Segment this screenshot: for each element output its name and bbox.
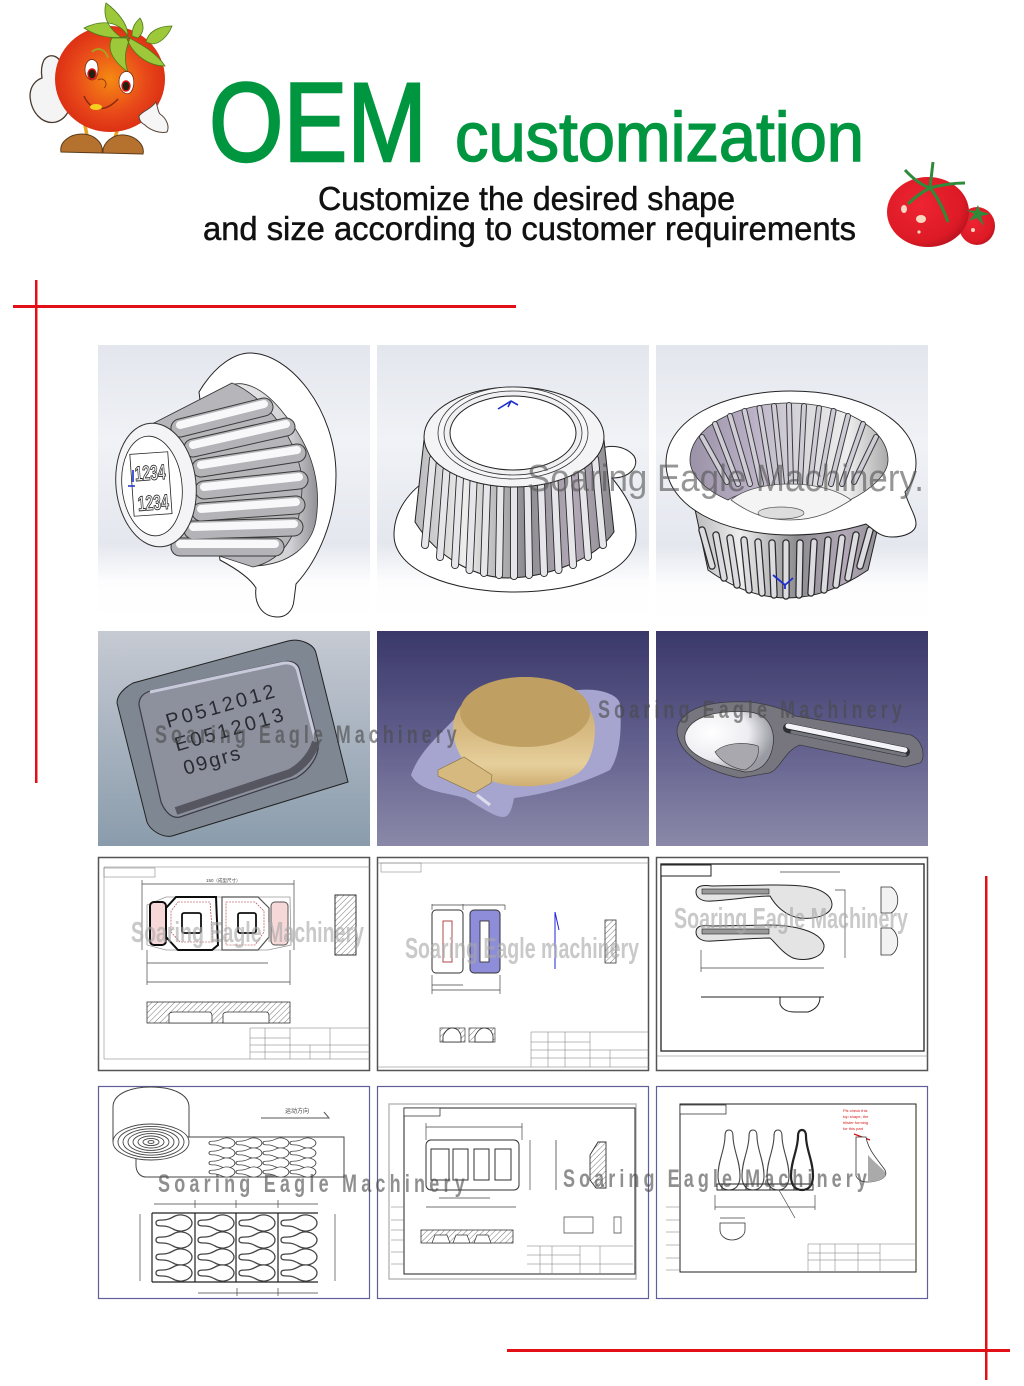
material strip xyxy=(136,1137,344,1177)
cup cavity wall xyxy=(690,403,888,500)
mascot smile xyxy=(84,96,118,109)
drawing sheet lines xyxy=(104,867,370,1059)
left slot xyxy=(443,921,452,962)
lower section view xyxy=(147,1002,290,1023)
drawing label box xyxy=(404,1108,440,1116)
cup lid circle xyxy=(450,396,576,470)
left pocket xyxy=(432,910,463,973)
panel: drawing of twin tray xyxy=(98,858,370,1070)
decorative corner: top left red cross lines xyxy=(13,280,516,783)
watermark: spoon model: Soaring Eagle Machinery xyxy=(598,695,902,724)
direction arrow xyxy=(261,1112,329,1118)
direction label: 运动方向 xyxy=(285,1107,309,1115)
cup flange with tab xyxy=(394,446,636,592)
gold tab xyxy=(438,757,492,793)
dimension lines xyxy=(426,1123,530,1207)
cup flange with tab xyxy=(199,353,336,617)
mascot shoes xyxy=(61,134,143,154)
profile view xyxy=(701,997,824,1012)
panel: drawing of two spoons xyxy=(656,858,928,1070)
cavity ribs xyxy=(702,405,876,484)
title block xyxy=(531,1032,649,1067)
tray outline xyxy=(426,1140,519,1190)
left strip table xyxy=(391,1207,404,1264)
spoon base row xyxy=(717,1184,813,1190)
vertical label line xyxy=(555,1140,557,1190)
watermark: drawing three: Soaring Eagle Machinery xyxy=(674,903,908,935)
drawing label box xyxy=(661,865,711,876)
cup body xyxy=(415,440,614,578)
right pocket filled xyxy=(470,910,500,973)
blue direction line xyxy=(555,912,559,969)
cup end face xyxy=(110,419,202,551)
drawing sheet lines xyxy=(378,863,649,1067)
label plate with numbers: 1234 xyxy=(137,491,170,516)
mascot leaves xyxy=(84,3,172,72)
mascot: tomato character xyxy=(30,3,172,154)
panel: spoon model xyxy=(656,631,928,846)
axis marker xyxy=(498,401,518,409)
panel background xyxy=(377,345,649,620)
mascot right glove xyxy=(139,102,168,133)
embossed codes: P0512012 xyxy=(163,680,280,733)
left strip table xyxy=(666,1207,680,1270)
mascot legs xyxy=(85,125,118,141)
tray slots xyxy=(431,1149,511,1180)
inner flange ring xyxy=(225,384,318,566)
small part views xyxy=(564,1217,621,1233)
mascot tongue xyxy=(90,104,102,110)
cup rim collar xyxy=(424,387,604,487)
side section view xyxy=(335,895,356,955)
panel: drawing of two pockets xyxy=(378,858,649,1070)
panel: embossed tray model xyxy=(98,631,370,846)
spoon bowl xyxy=(685,712,773,772)
strip spoons xyxy=(209,1138,316,1177)
dimension line top xyxy=(142,880,294,985)
side spoon view xyxy=(856,1137,886,1182)
spoon flange xyxy=(677,702,923,778)
panel: four-slot tray drawing xyxy=(378,1086,648,1298)
drawing frame xyxy=(378,858,648,1070)
watermark: drawing two: Soaring Eagle machinery xyxy=(405,933,639,965)
cup body xyxy=(150,383,302,567)
tray flange xyxy=(117,640,348,836)
dimension lines xyxy=(715,1190,815,1218)
drawing frame xyxy=(378,1086,648,1298)
gold cup body xyxy=(453,677,595,786)
twin tray outline xyxy=(147,897,291,950)
cup body xyxy=(693,500,882,598)
watermark: top row: Soaring Eagle Machinery. xyxy=(527,458,924,500)
panel background xyxy=(98,631,370,846)
drawing sheet border xyxy=(389,1104,636,1279)
spoon inner bowl xyxy=(715,744,758,770)
mascot pupils xyxy=(88,69,130,91)
mascot eyes xyxy=(85,59,134,94)
title: OEM: OEM xyxy=(209,60,427,185)
cup ribs xyxy=(180,404,299,547)
panel: 3D cup cavity view xyxy=(656,345,928,625)
cup outer ribs xyxy=(702,530,870,596)
title block xyxy=(808,1244,915,1271)
drawing label box xyxy=(104,868,155,877)
panel background xyxy=(377,631,649,846)
side view xyxy=(605,920,616,963)
red note: Pls check this xyxy=(843,1108,867,1113)
right slot xyxy=(480,921,489,962)
watermark: tray model: Soaring Eagle Machinery xyxy=(155,720,457,749)
coil spiral xyxy=(113,1124,189,1160)
small tab slot xyxy=(477,795,490,805)
icon: two tomatoes xyxy=(887,162,995,247)
lower spoon handle slot xyxy=(702,929,769,934)
embossed codes: E0512013 xyxy=(172,703,289,756)
panel: 3D cup side view xyxy=(98,345,370,620)
dimension lines xyxy=(701,872,845,972)
mascot left glove xyxy=(30,56,71,122)
label plate with numbers xyxy=(130,452,172,516)
embossed codes xyxy=(163,679,296,781)
drawing frame xyxy=(656,858,928,1070)
axis marker xyxy=(128,470,135,486)
drawing sheet border xyxy=(680,1104,916,1272)
panel background xyxy=(656,631,928,846)
panel background xyxy=(656,345,928,625)
watermark: coil drawing: Soaring Eagle Machinery xyxy=(158,1169,465,1198)
header xyxy=(30,3,995,247)
title block xyxy=(250,1028,370,1059)
watermark: spoon drawing: Soaring Eagle Machinery xyxy=(563,1164,867,1193)
section view xyxy=(421,1230,513,1243)
mascot nose xyxy=(98,79,106,88)
label plate with numbers: 1234 xyxy=(134,461,167,486)
embossed codes: 09grs xyxy=(181,742,245,780)
tray pocket xyxy=(139,661,318,817)
cup flange with tab xyxy=(666,391,916,537)
coil cylinder xyxy=(113,1087,189,1142)
panel: four spoon drawing xyxy=(656,1086,928,1298)
lower grid rails xyxy=(152,1213,318,1282)
panel: 3D cup top view xyxy=(377,345,649,620)
spoon handle slot xyxy=(788,728,905,752)
tray highlights and shadow xyxy=(150,663,316,742)
small bowl view xyxy=(720,1223,745,1240)
axis marker xyxy=(773,575,793,589)
drawing frame xyxy=(656,1086,928,1298)
lower grid spoons xyxy=(156,1215,317,1281)
red note: blister forming xyxy=(843,1120,868,1125)
side views xyxy=(881,887,898,955)
mascot brow xyxy=(92,49,108,58)
side view xyxy=(590,1142,606,1188)
red note xyxy=(843,1108,869,1131)
title block xyxy=(527,1246,633,1274)
small sections xyxy=(440,1028,495,1042)
upper spoon handle slot xyxy=(702,889,769,894)
title: customization: customization xyxy=(455,98,864,176)
drawing sheet border xyxy=(661,864,924,1051)
dimension lines xyxy=(140,1200,335,1296)
vertical spoons xyxy=(718,1130,813,1190)
panel background xyxy=(98,345,370,620)
red pointer xyxy=(854,1134,870,1140)
red note: top shape, the xyxy=(843,1114,869,1119)
lower spoon xyxy=(696,925,824,959)
watermark: drawing one: Soaring Eagle Machinery xyxy=(131,917,364,949)
subtitle line 2: and size according to customer requirements xyxy=(203,210,856,247)
subtitle line 1: Customize the desired shape xyxy=(318,180,735,217)
drawing label box xyxy=(680,1105,726,1114)
gold cup top xyxy=(460,677,590,747)
mascot tomato body xyxy=(55,26,165,132)
panel: gold pod model xyxy=(377,631,649,846)
dimension lines xyxy=(432,904,505,994)
drawing frame xyxy=(98,858,370,1070)
cup ribs xyxy=(425,459,603,576)
lavender flange xyxy=(411,690,621,817)
red note: for this part xyxy=(843,1126,864,1131)
panel: coil and spoon grid drawing xyxy=(98,1086,370,1298)
decorative corner: bottom right red cross lines xyxy=(507,876,1010,1380)
dimension text: 150（成型尺寸） xyxy=(206,877,241,884)
cavity floor xyxy=(731,484,851,520)
drawing frame xyxy=(98,1086,370,1298)
upper spoon xyxy=(696,885,832,918)
drawing label box xyxy=(381,863,421,872)
